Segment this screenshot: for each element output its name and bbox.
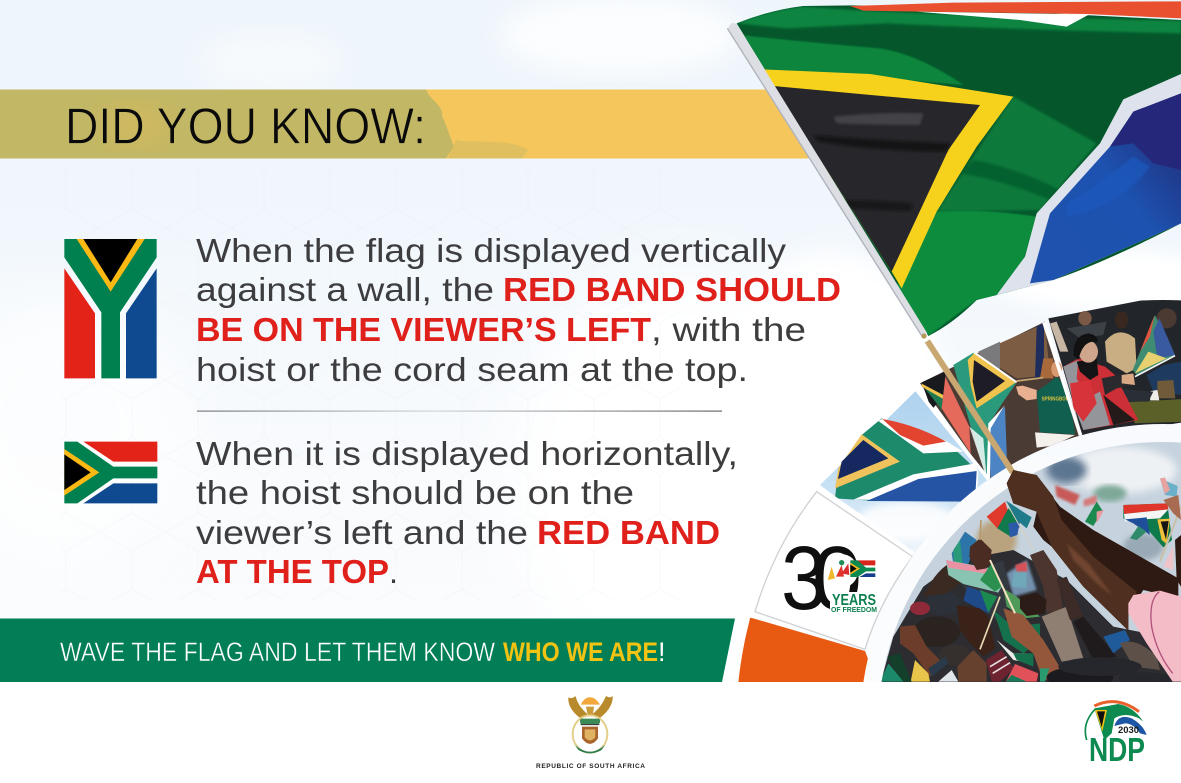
logo: 30 years of freedom: 3 [781, 529, 827, 629]
text block: vertical display rule [196, 232, 841, 388]
text block: horizontal display rule: RED BAND [537, 514, 720, 551]
text block: vertical display rule: , with the [651, 311, 806, 348]
logo: NDP 2030: 2030 [1118, 725, 1139, 736]
heading: did you know: DID YOU KNOW: [65, 98, 426, 154]
logo: 30 years of freedom: YEARS [832, 592, 876, 609]
tile: sky flag photo [820, 390, 990, 558]
green slogan band: ! [658, 637, 666, 667]
text block: horizontal display rule: viewer’s left and the [196, 514, 528, 551]
tile: orange [738, 618, 868, 682]
main waving flag [727, 1, 1181, 339]
logo: NDP 2030: NDP [1089, 731, 1145, 768]
green slogan band [0, 618, 735, 682]
flags in the crowd [987, 502, 1008, 528]
photo: flag pole [927, 341, 1013, 472]
tile: child with flag photo [920, 322, 1083, 483]
flag hem [727, 23, 927, 337]
green slogan band: WHO WE ARE [503, 637, 658, 667]
text block: horizontal display rule: When it is displayed horizontally, [196, 435, 738, 472]
logo: NDP 2030 [1085, 702, 1147, 768]
photo arc tiles [720, 292, 1181, 690]
text block: horizontal display rule: AT THE TOP [196, 553, 389, 590]
text block: horizontal display rule: . [389, 553, 398, 590]
logo: 30 years of freedom [781, 529, 878, 629]
photo: crowd waving flags [880, 440, 1181, 688]
gold heading band [0, 90, 815, 158]
text block: vertical display rule: When the flag is displayed vertically [196, 232, 787, 269]
flag cloth [737, 5, 1181, 336]
tile: child with flag photo: SPRINGBOK [1042, 396, 1069, 402]
logo: coat of arms [536, 696, 645, 770]
white footer [0, 682, 1181, 783]
text block: vertical display rule: BE ON THE VIEWER’S LEFT [196, 311, 651, 348]
text block: vertical display rule: against a wall, the [196, 271, 494, 308]
hands in the crowd [969, 538, 992, 570]
text block: vertical display rule: RED BAND SHOULD [503, 271, 841, 308]
tile: 30 years outline [755, 492, 913, 649]
text block: horizontal display rule: the hoist should be on the [196, 474, 634, 511]
text block: horizontal display rule [196, 435, 738, 590]
sticks [990, 560, 1015, 613]
logo: coat of arms: REPUBLIC OF SOUTH AFRICA [536, 763, 645, 770]
green slogan band: WAVE THE FLAG AND LET THEM KNOW [60, 637, 495, 667]
logo: 30 years of freedom: OF FREEDOM [831, 605, 877, 614]
icon: vertical flag [64, 239, 157, 378]
text block: vertical display rule: hoist or the cord seam at the top. [196, 351, 748, 388]
icon: horizontal flag [64, 442, 157, 503]
photo: raised arm, hand and pink shirt [1007, 470, 1181, 682]
tile: woman with flag photo [1048, 292, 1181, 438]
logo: 30 years of freedom: 0 [812, 529, 862, 629]
